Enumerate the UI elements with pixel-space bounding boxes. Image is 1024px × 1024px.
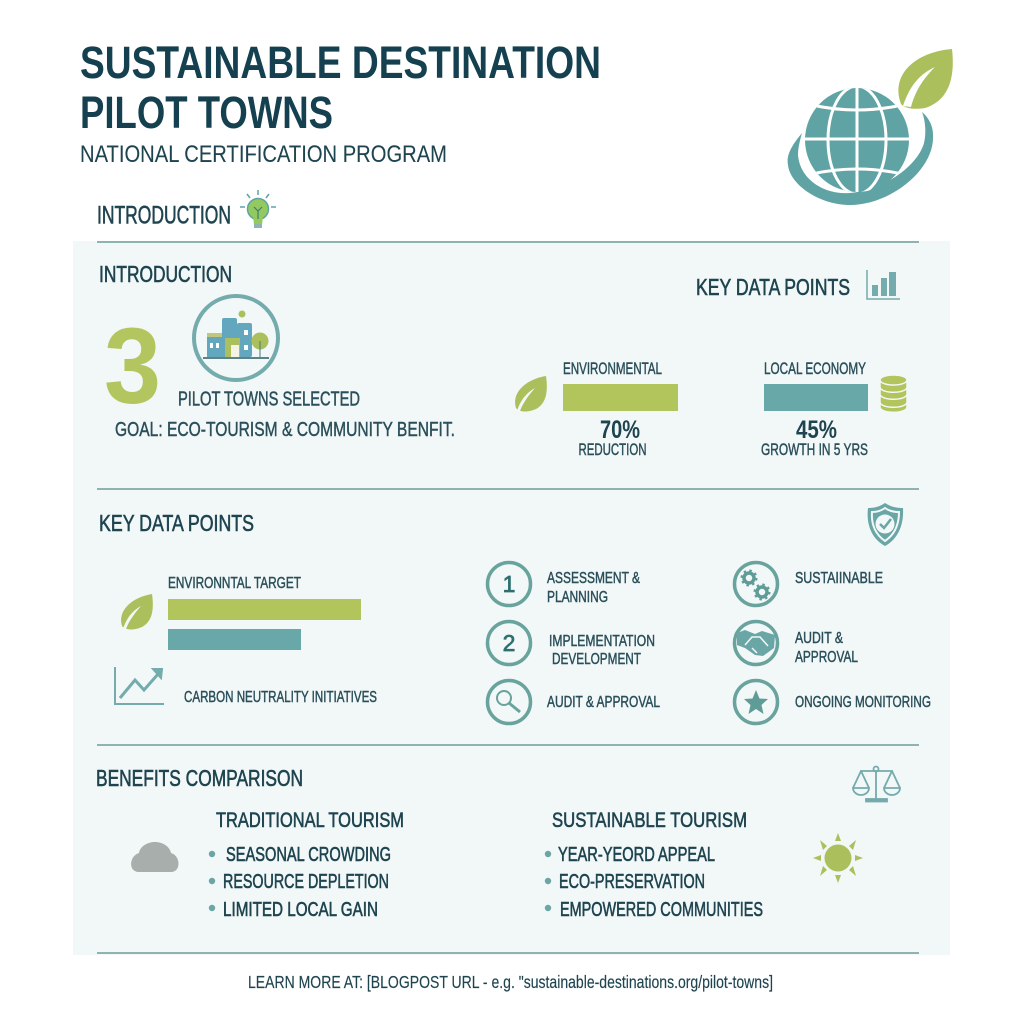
icon: globe with leaf [788,49,953,205]
sustainable tourism: YEAR-YEORD APPEAL [558,844,715,866]
bar: teal [168,629,301,650]
item: ongoing monitoring: ONGOING MONITORING [795,694,931,711]
icon: cloud [131,842,178,872]
icon: leaf [121,594,153,630]
divider [97,241,919,243]
panel: introduction [99,261,455,441]
icon: shield [868,503,903,546]
icon: town [194,296,278,380]
subtitle: NATIONAL CERTIFICATION PROGRAM [80,141,447,168]
icon: sun [813,833,863,883]
heading: BENEFITS COMPARISON [96,765,303,791]
traditional tourism: SEASONAL CROWDING [226,844,391,866]
footer: LEARN MORE AT: [BLOGPOST URL - e.g. "sustainable-destinations.org/pilot-towns] [248,972,773,992]
divider [97,744,919,746]
panel: benefits comparison [96,765,900,921]
traditional tourism: LIMITED LOCAL GAIN [223,899,378,921]
metric: local economy: 45% [796,416,837,444]
step 1: 1 [503,571,515,597]
sustainable tourism: EMPOWERED COMMUNITIES [560,899,763,921]
heading: KEY DATA POINTS [696,274,850,300]
step 2: DEVELOPMENT [552,651,641,668]
icon: coins [880,375,907,412]
title [80,37,601,138]
metric: local economy: GROWTH IN 5 YRS [761,440,868,459]
item: audit handshake [734,622,858,666]
sustainable tourism: ECO-PRESERVATION [559,871,705,893]
label: target: ENVIRONNTAL TARGET [168,575,301,592]
panel: process steps [488,562,931,724]
traditional tourism [209,809,404,921]
metric: local economy [761,359,868,459]
panel: key data points top right [515,270,907,459]
heading: introduction: INTRODUCTION [97,202,231,230]
heading: INTRODUCTION [99,261,232,287]
sustainable tourism: SUSTAINABLE TOURISM [552,809,747,832]
step 1: ASSESSMENT & [547,570,640,587]
icon: line chart [115,667,164,704]
metric: local economy: LOCAL ECONOMY [764,359,866,378]
heading: KEY DATA POINTS [99,510,254,536]
item: audit handshake: AUDIT & [795,630,843,647]
metric: environmental [563,359,678,459]
step 3: AUDIT & APPROVAL [547,694,660,711]
label: pilot towns: PILOT TOWNS SELECTED [178,388,360,410]
icon: scales [853,766,900,802]
bar: green [168,599,361,620]
icon: leaf [515,376,547,412]
traditional tourism: TRADITIONAL TOURISM [216,809,404,832]
title: PILOT TOWNS [80,87,333,138]
divider [97,488,919,490]
item: sustainable: SUSTAIINABLE [795,570,883,587]
step 2: 2 [503,630,515,656]
icon: bar chart [867,270,900,299]
big number 3: 3 [104,305,161,426]
item: sustainable [734,562,883,606]
label: carbon: CARBON NEUTRALITY INITIATIVES [184,689,377,706]
traditional tourism: RESOURCE DEPLETION [223,871,389,893]
item: ongoing monitoring [734,680,931,724]
panel: key data points [99,503,903,706]
step 3 [488,680,660,724]
background panel [73,241,950,955]
item: audit handshake: APPROVAL [795,649,858,666]
metric: environmental: 70% [600,416,640,444]
step 2: IMPLEMENTATION [549,633,655,650]
title: SUSTAINABLE DESTINATION [80,37,601,88]
divider [97,952,919,954]
metric: environmental: REDUCTION [578,440,646,459]
step 2 [488,622,655,668]
icon: light bulb [240,190,276,228]
metric: environmental: ENVIRONMENTAL [563,359,662,378]
step 1: PLANNING [547,589,608,606]
goal text: GOAL: ECO-TOURISM & COMMUNITY BENFIT. [115,418,455,441]
step 1 [488,562,640,606]
sustainable tourism [545,809,763,921]
